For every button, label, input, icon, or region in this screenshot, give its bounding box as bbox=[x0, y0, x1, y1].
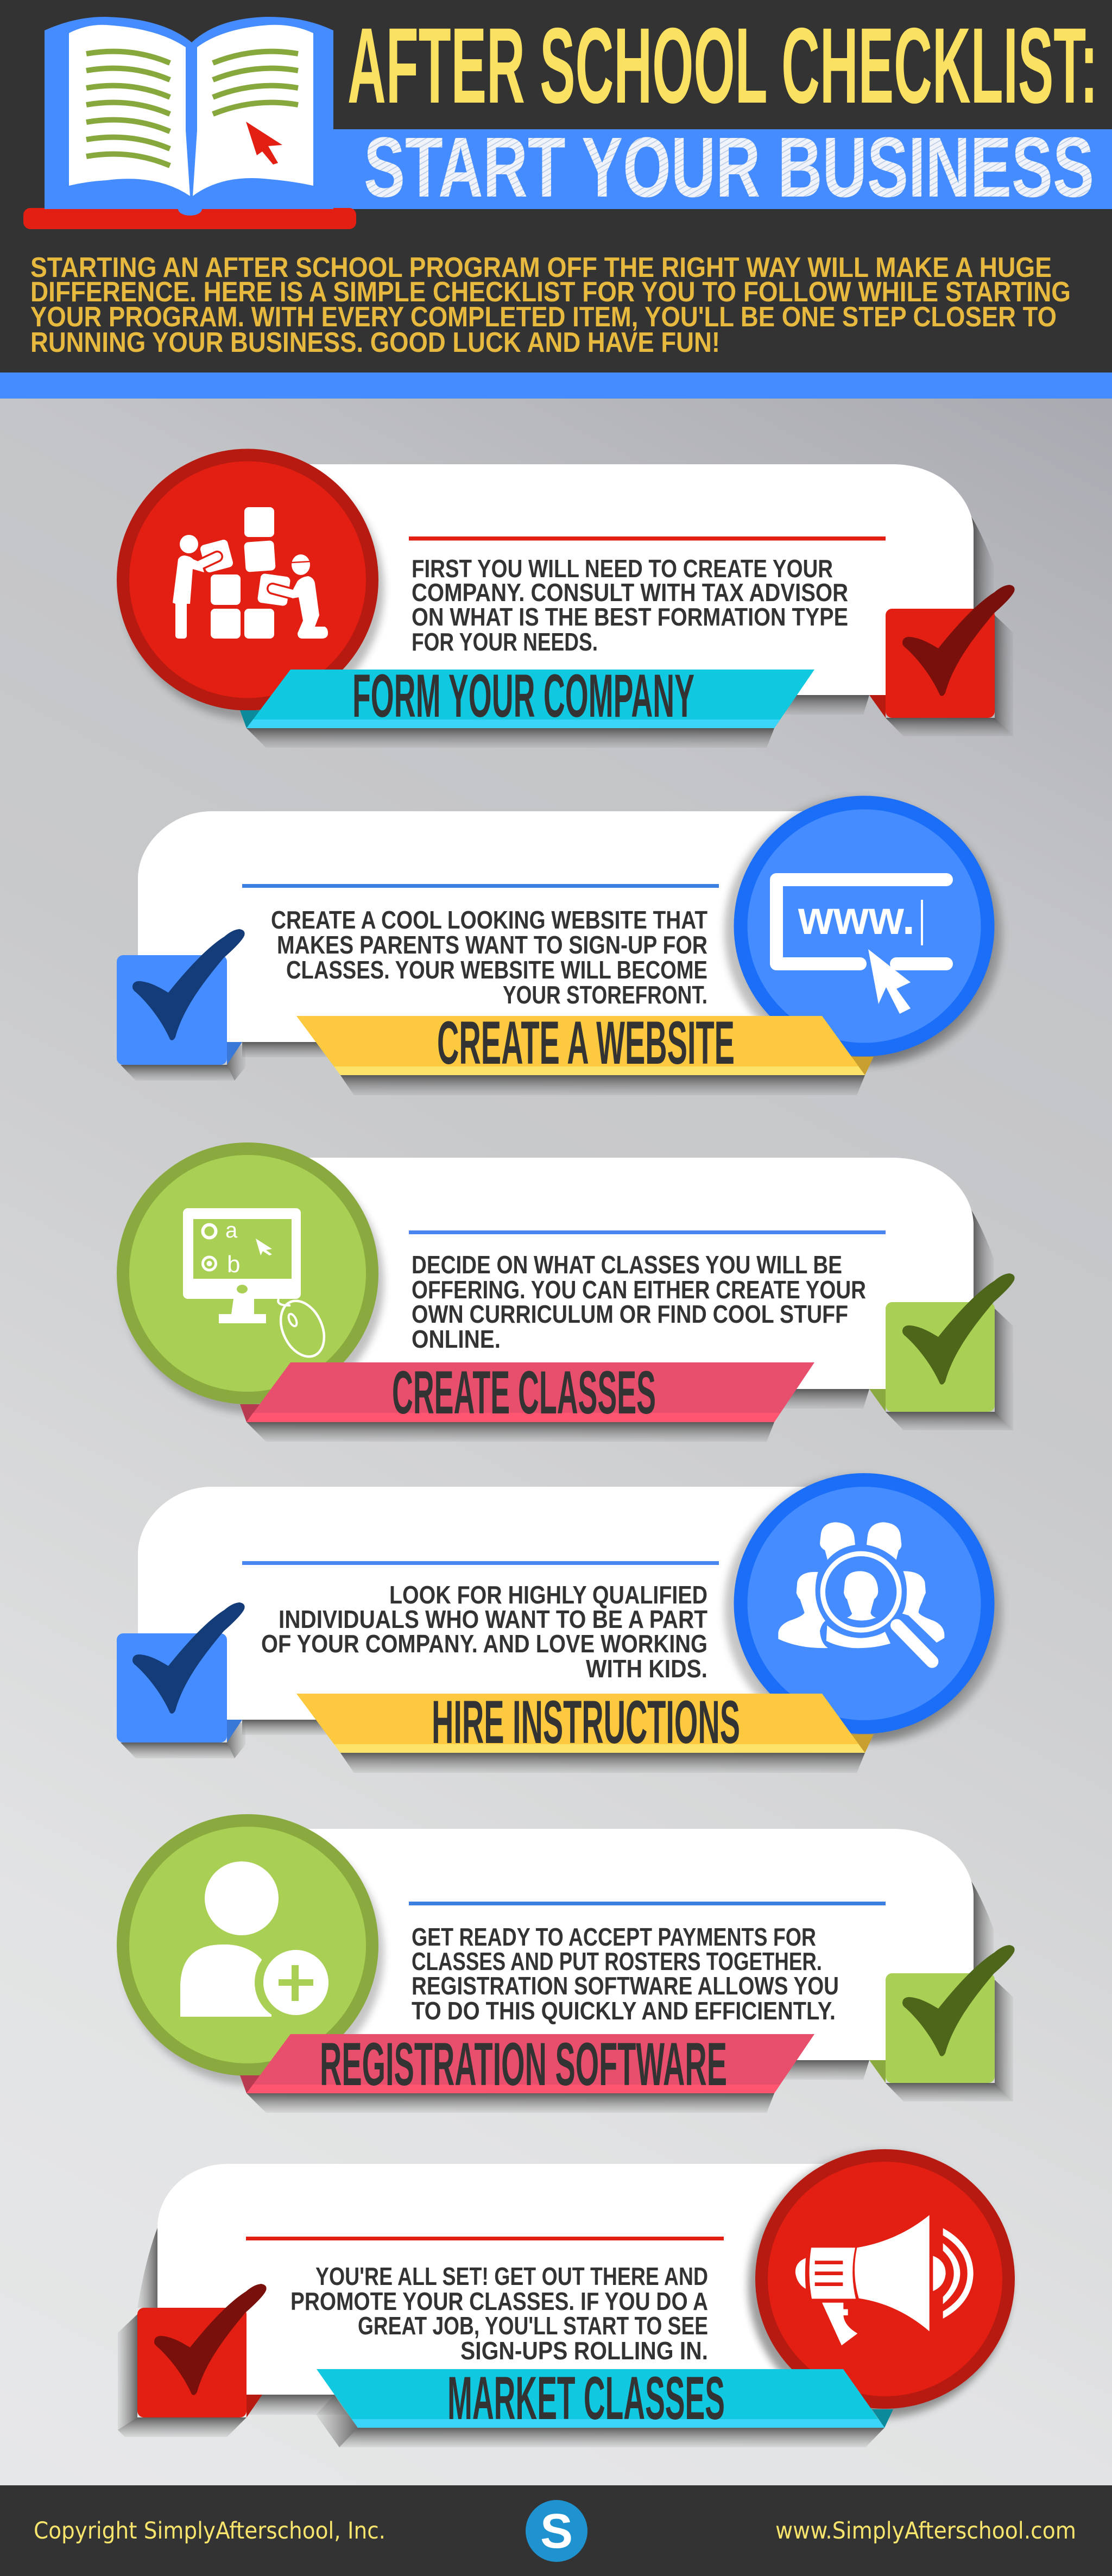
footer bbox=[0, 2485, 1112, 2576]
panel: form your company bbox=[117, 449, 1015, 748]
icon: browser www: www. bbox=[798, 892, 915, 944]
body text: PROMOTE YOUR CLASSES. IF YOU DO A bbox=[290, 2287, 708, 2315]
ribbon banner: MARKET CLASSES bbox=[447, 2364, 725, 2432]
ribbon banner: HIRE INSTRUCTIONS bbox=[432, 1688, 740, 1756]
icon: people and magnifier bbox=[778, 1522, 944, 1662]
body text: OWN CURRICULUM OR FIND COOL STUFF bbox=[412, 1300, 848, 1328]
body text: GET READY TO ACCEPT PAYMENTS FOR bbox=[412, 1923, 816, 1951]
circle badge bbox=[734, 796, 995, 1057]
divider line bbox=[246, 2237, 724, 2240]
circle badge bbox=[755, 2149, 1015, 2409]
card bbox=[248, 1829, 974, 2060]
body text: OFFERING. YOU CAN EITHER CREATE YOUR bbox=[412, 1276, 866, 1304]
body text: GREAT JOB, YOU'LL START TO SEE bbox=[358, 2312, 708, 2340]
body text: COMPANY. CONSULT WITH TAX ADVISOR bbox=[412, 578, 848, 607]
ribbon banner bbox=[296, 1009, 874, 1077]
body text: OF YOUR COMPANY. AND LOVE WORKING bbox=[261, 1630, 707, 1658]
ribbon banner bbox=[240, 1359, 814, 1426]
ribbon banner bbox=[296, 1688, 874, 1756]
icon: add user bbox=[180, 1861, 333, 2022]
panel: market classes bbox=[118, 2149, 1015, 2447]
body text: TO DO THIS QUICKLY AND EFFICIENTLY. bbox=[412, 1997, 836, 2025]
website text: www.SimplyAfterschool.com bbox=[775, 2517, 1076, 2545]
circle badge bbox=[117, 1142, 378, 1404]
body text bbox=[271, 906, 707, 1009]
divider line bbox=[242, 884, 719, 888]
body text: CLASSES. YOUR WEBSITE WILL BECOME bbox=[286, 956, 707, 984]
body text: YOUR STOREFRONT. bbox=[503, 981, 707, 1009]
icon: people stacking blocks bbox=[173, 507, 328, 639]
icon: computer quiz: a bbox=[225, 1218, 238, 1242]
body text: SIGN-UPS ROLLING IN. bbox=[460, 2337, 708, 2365]
body text: REGISTRATION SOFTWARE ALLOWS YOU bbox=[412, 1972, 839, 2000]
divider line bbox=[242, 1561, 719, 1565]
body text: ON WHAT IS THE BEST FORMATION TYPE bbox=[412, 603, 848, 631]
logo: S bbox=[540, 2504, 573, 2559]
icon: megaphone bbox=[795, 2215, 974, 2345]
checkbox bbox=[869, 1945, 1015, 2101]
ribbon banner: REGISTRATION SOFTWARE bbox=[320, 2030, 727, 2098]
checkbox bbox=[117, 929, 245, 1081]
body text: LOOK FOR HIGHLY QUALIFIED bbox=[389, 1581, 707, 1609]
divider line bbox=[409, 536, 886, 541]
body text: CREATE A COOL LOOKING WEBSITE THAT bbox=[271, 906, 707, 934]
body text: ONLINE. bbox=[412, 1325, 501, 1353]
body text bbox=[412, 554, 848, 656]
icon: open book bbox=[23, 17, 356, 229]
card bbox=[248, 1158, 974, 1389]
icon: browser www bbox=[776, 880, 946, 1014]
card bbox=[248, 464, 974, 695]
ribbon banner: FORM YOUR COMPANY bbox=[352, 662, 694, 730]
panel: create a website bbox=[117, 796, 1002, 1095]
body text: WITH KIDS. bbox=[586, 1655, 707, 1683]
ribbon banner bbox=[240, 662, 814, 730]
icon: computer quiz: b bbox=[227, 1251, 240, 1278]
body text bbox=[290, 2262, 708, 2365]
divider line bbox=[409, 1230, 886, 1234]
card bbox=[138, 1487, 864, 1720]
panel: registration software bbox=[117, 1814, 1015, 2113]
body text: CLASSES AND PUT ROSTERS TOGETHER. bbox=[412, 1947, 822, 1975]
body text: FIRST YOU WILL NEED TO CREATE YOUR bbox=[412, 554, 833, 583]
body text bbox=[412, 1923, 839, 2025]
intro text: RUNNING YOUR BUSINESS. GOOD LUCK AND HAVE FUN! bbox=[30, 327, 720, 358]
ribbon banner bbox=[317, 2364, 893, 2432]
intro text bbox=[30, 252, 1071, 358]
body text bbox=[261, 1581, 707, 1683]
circle badge bbox=[734, 1473, 995, 1734]
card bbox=[138, 811, 864, 1042]
ribbon banner bbox=[240, 2030, 814, 2098]
icon: computer quiz bbox=[183, 1208, 332, 1363]
blue stripe under intro bbox=[0, 372, 1112, 399]
checkbox bbox=[117, 1602, 245, 1758]
ribbon banner: CREATE A WEBSITE bbox=[437, 1009, 735, 1077]
header panel bbox=[0, 0, 1112, 399]
body text: MAKES PARENTS WANT TO SIGN-UP FOR bbox=[277, 931, 707, 959]
copyright text: Copyright SimplyAfterschool, Inc. bbox=[34, 2517, 386, 2545]
checkbox bbox=[869, 1273, 1015, 1430]
panel: hire instructions bbox=[117, 1473, 1002, 1773]
body text: DECIDE ON WHAT CLASSES YOU WILL BE bbox=[412, 1251, 842, 1279]
checkbox bbox=[118, 2284, 267, 2437]
circle badge bbox=[117, 449, 378, 710]
ribbon banner: CREATE CLASSES bbox=[392, 1359, 656, 1426]
subtitle band bbox=[326, 129, 1112, 209]
divider line bbox=[409, 1902, 886, 1905]
body text bbox=[412, 1251, 866, 1353]
logo bbox=[526, 2500, 587, 2562]
circle badge bbox=[117, 1814, 378, 2076]
body text: YOU'RE ALL SET! GET OUT THERE AND bbox=[315, 2262, 708, 2290]
body text: FOR YOUR NEEDS. bbox=[412, 628, 598, 656]
card bbox=[157, 2164, 885, 2395]
panel: create classes bbox=[117, 1142, 1015, 1442]
body text: INDIVIDUALS WHO WANT TO BE A PART bbox=[279, 1605, 707, 1633]
checkbox bbox=[869, 585, 1015, 736]
